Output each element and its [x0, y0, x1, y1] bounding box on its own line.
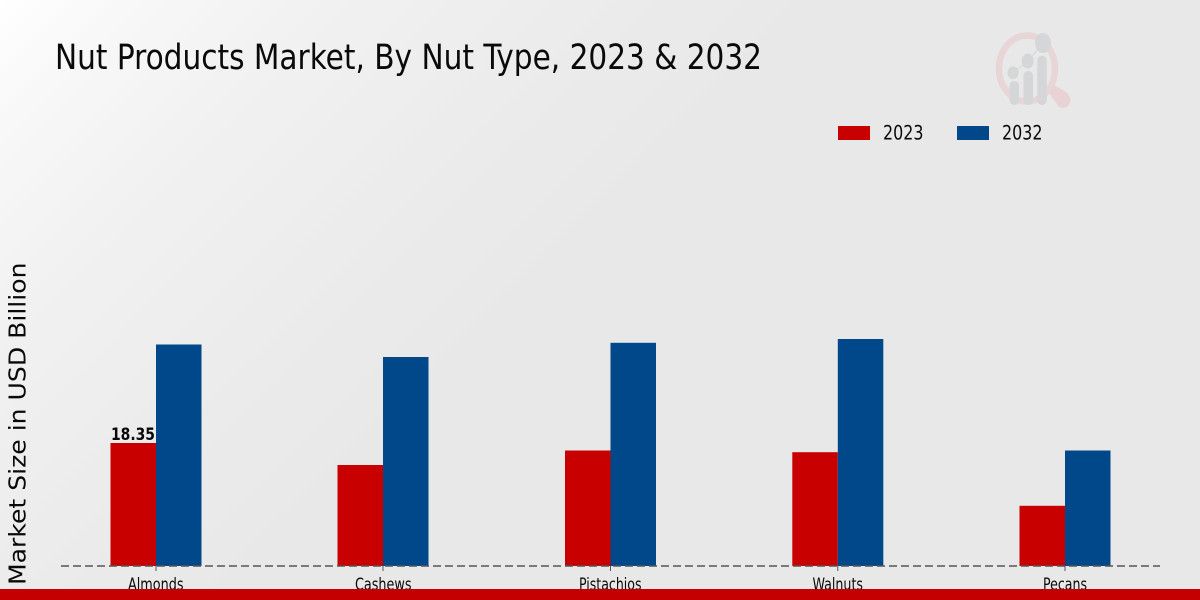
bars: Almonds — [110, 344, 202, 566]
category labels: Cashews — [355, 575, 412, 594]
bars: Pistachios — [565, 343, 656, 566]
legend — [838, 122, 1042, 144]
title: Nut Products Market, By Nut Type, 2023 & 2032 — [55, 38, 762, 78]
bars: Cashews — [338, 357, 428, 566]
legend: 2023: 2023 — [883, 122, 924, 144]
bars: Walnuts — [792, 339, 883, 566]
data label: 18.35: 18.35 — [111, 425, 155, 444]
bar chart — [61, 339, 1160, 594]
axis ticks — [156, 566, 1065, 571]
legend: 2032 — [957, 122, 1042, 144]
footer bar — [0, 589, 1200, 600]
category labels: Walnuts — [812, 575, 863, 594]
legend: 2023 — [838, 122, 924, 144]
category labels: Pecans — [1043, 575, 1087, 594]
legend: 2032: 2032 — [1002, 122, 1042, 144]
category labels: Pistachios — [579, 575, 642, 594]
y axis label: Market Size in USD Billion — [6, 262, 32, 585]
axis baseline — [61, 565, 1160, 567]
category labels — [128, 575, 1087, 594]
category labels: Almonds — [128, 575, 184, 594]
bars: Pecans — [1020, 450, 1110, 566]
icon: watermark magnifier logo — [999, 33, 1070, 108]
